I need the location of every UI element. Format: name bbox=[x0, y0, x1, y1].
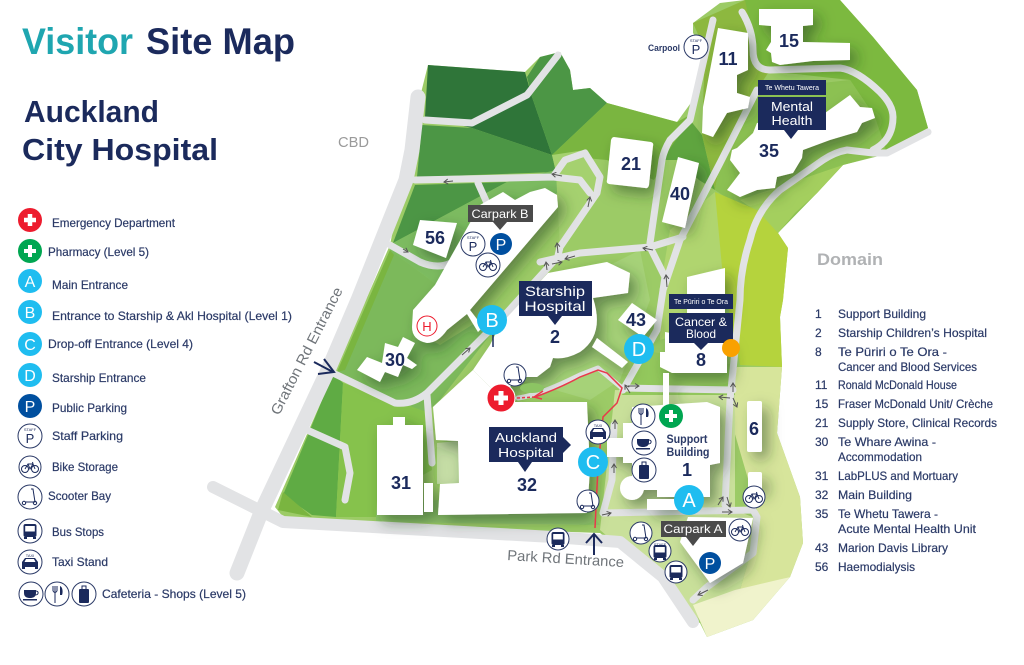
arrow: Grafton Rd entrance bbox=[314, 359, 334, 374]
legend: bike storage: Bike Storage bbox=[52, 460, 118, 474]
legend: scooter bay: Scooter Bay bbox=[48, 489, 111, 503]
building directory list bbox=[815, 307, 997, 574]
legend: public parking: P bbox=[25, 399, 35, 416]
label: Te Puriri o Te Ora bbox=[669, 294, 733, 309]
legend: emergency department: Emergency Department bbox=[52, 216, 176, 230]
building 2 starship bbox=[473, 262, 630, 402]
legend: emergency department bbox=[18, 208, 176, 232]
icon: shop bag bbox=[632, 458, 656, 482]
legend: map symbols bbox=[18, 208, 292, 606]
building directory list: 2 bbox=[815, 326, 822, 340]
title: Visitor bbox=[22, 21, 133, 62]
legend: entrance b: Entrance to Starship & Akl Hospital (Level 1) bbox=[52, 309, 292, 323]
label: Te Puriri o Te Ora: Te Pūriri o Te Ora bbox=[674, 297, 729, 306]
icon: carpool staff parking bbox=[684, 35, 708, 59]
label: Park Rd Entrance: Park Rd Entrance bbox=[507, 548, 625, 571]
legend: drop-off entrance bbox=[18, 332, 193, 356]
label: Cancer and Blood bbox=[669, 313, 733, 350]
legend: public parking bbox=[18, 394, 127, 418]
label: Mental Health: Mental bbox=[771, 99, 813, 114]
icon: emergency department bbox=[487, 384, 515, 412]
label: Cancer and Blood: Cancer & bbox=[675, 315, 727, 329]
icon: helipad H bbox=[417, 316, 437, 336]
icon: carpool staff parking: P bbox=[692, 42, 700, 57]
label: Mental Health bbox=[758, 97, 826, 139]
building directory list: 11 bbox=[815, 378, 828, 392]
label: Starship Hospital: Hospital bbox=[524, 298, 586, 314]
building numbers: 15 bbox=[779, 31, 799, 51]
building directory list: 1 bbox=[815, 307, 822, 321]
building directory list: Haemodialysis bbox=[838, 560, 915, 574]
legend: main entrance: A bbox=[25, 274, 36, 291]
building directory list: 15 bbox=[815, 397, 829, 411]
arrow: Park Rd entrance bbox=[586, 534, 602, 555]
marker: entrance C: C bbox=[586, 452, 600, 474]
icon: taxi stand: TAXI bbox=[594, 423, 602, 428]
legend: staff parking: STAFF bbox=[24, 427, 37, 432]
label: Auckland Hospital: Hospital bbox=[498, 445, 554, 460]
label: Te Whetu Tawera: Te Whetu Tawera bbox=[765, 83, 820, 92]
icon: scooter near C bbox=[577, 490, 599, 512]
icon: bike carpark A bbox=[729, 519, 751, 541]
icon: staff parking bbox=[461, 232, 485, 256]
marker: orange dot bbox=[722, 339, 740, 357]
label: CBD: CBD bbox=[338, 134, 369, 151]
legend: cafeteria and shops bbox=[19, 582, 246, 606]
map: road network bbox=[213, 12, 928, 622]
building directory list: 21 bbox=[815, 416, 829, 430]
label: Support Building bbox=[666, 432, 710, 459]
subtitle: hospital name: Auckland bbox=[24, 94, 159, 129]
building directory list: Support Building bbox=[838, 307, 926, 321]
building directory list: 30 bbox=[815, 435, 829, 449]
building numbers bbox=[385, 31, 799, 495]
building directory list: 43 bbox=[815, 541, 829, 555]
label: Grafton Rd Entrance: Grafton Rd Entrance bbox=[268, 285, 347, 418]
building directory list: Acute Mental Health Unit bbox=[838, 522, 977, 536]
building directory list: 31 bbox=[815, 469, 829, 483]
marker: entrance B: B bbox=[485, 310, 499, 332]
label: Starship Hospital bbox=[519, 281, 592, 325]
icon: staff parking: STAFF bbox=[467, 235, 480, 240]
icon: bus stop carpark A bbox=[665, 561, 687, 583]
label: Support Building: Support bbox=[666, 432, 708, 446]
legend: main entrance bbox=[18, 269, 128, 293]
building 56 bbox=[413, 220, 457, 258]
scooter and emergency route (red) bbox=[517, 370, 622, 528]
building numbers: 40 bbox=[670, 184, 690, 204]
map icons bbox=[417, 35, 765, 583]
icon: cafe cup bbox=[632, 431, 656, 455]
building 8 bbox=[660, 268, 727, 405]
legend: starship entrance: Starship Entrance bbox=[52, 371, 146, 385]
label: Carpark A bbox=[661, 521, 726, 546]
icon: bike storage B bbox=[476, 253, 500, 277]
label: Carpool: Carpool bbox=[648, 43, 680, 53]
icon: staff bus bbox=[649, 540, 671, 562]
building directory list: Accommodation bbox=[838, 450, 922, 464]
legend: bus stops bbox=[18, 519, 104, 543]
building 21 bbox=[607, 137, 653, 188]
building directory list: Main Building bbox=[838, 488, 912, 502]
link to entrance D bbox=[592, 338, 628, 368]
marker: entrance C bbox=[578, 447, 608, 477]
marker: entrance D: D bbox=[632, 339, 646, 361]
building directory list: 56 bbox=[815, 560, 829, 574]
icon: public parking B bbox=[490, 233, 512, 255]
label: Auckland Hospital bbox=[489, 427, 571, 472]
building numbers: 6 bbox=[749, 419, 759, 439]
icon: cafeteria cutlery bbox=[631, 404, 655, 428]
building directory list: Starship Children’s Hospital bbox=[838, 326, 987, 340]
building numbers: 11 bbox=[718, 49, 738, 69]
building directory list: Te Pūriri o Te Ora - bbox=[838, 345, 947, 359]
building numbers: 31 bbox=[391, 473, 411, 493]
bridge link bbox=[607, 438, 623, 457]
building numbers: 43 bbox=[626, 310, 646, 330]
marker: entrance D bbox=[624, 334, 654, 364]
building 1 support bbox=[623, 402, 720, 497]
building directory list: Cancer and Blood Services bbox=[838, 360, 977, 374]
building numbers: 56 bbox=[425, 228, 445, 248]
building 31 bbox=[377, 417, 423, 515]
icon: public parking A bbox=[699, 552, 721, 574]
legend: entrance b bbox=[18, 300, 292, 324]
building numbers: 1 bbox=[682, 460, 692, 480]
icon: taxi stand bbox=[586, 420, 610, 444]
building 11 bbox=[702, 28, 750, 137]
label: Carpark B bbox=[468, 205, 533, 230]
building numbers: 35 bbox=[759, 141, 779, 161]
building numbers: 32 bbox=[517, 475, 537, 495]
building directory list: Marion Davis Library bbox=[838, 541, 948, 555]
building numbers: 21 bbox=[621, 154, 641, 174]
label: Te Whetu Tawera bbox=[758, 80, 826, 95]
building 30 bbox=[357, 337, 417, 382]
legend: drop-off entrance: Drop-off Entrance (Level 4) bbox=[48, 337, 193, 351]
legend: taxi stand: TAXI bbox=[26, 553, 34, 558]
title bbox=[22, 21, 295, 62]
legend: staff parking bbox=[18, 424, 123, 448]
icon: scooter near emergency bbox=[504, 364, 526, 386]
legend: taxi stand bbox=[18, 550, 108, 574]
legend: starship entrance bbox=[18, 363, 146, 387]
legend: bus stops: Bus Stops bbox=[52, 525, 104, 539]
building directory list: LabPLUS and Mortuary bbox=[838, 469, 958, 483]
legend: taxi stand: Taxi Stand bbox=[52, 555, 108, 569]
marker: entrance A: A bbox=[682, 490, 696, 512]
label: Starship Hospital: Starship bbox=[525, 283, 585, 299]
label: Auckland Hospital: Auckland bbox=[495, 430, 557, 445]
subtitle: hospital name bbox=[22, 94, 218, 167]
legend: public parking: Public Parking bbox=[52, 401, 127, 415]
building directory list: Ronald McDonald House bbox=[838, 378, 957, 392]
legend: main entrance: Main Entrance bbox=[52, 278, 128, 292]
legend: entrance b: B bbox=[25, 305, 35, 322]
building: carpark B block bbox=[412, 188, 558, 343]
icon: pharmacy bbox=[659, 404, 683, 428]
building numbers: 2 bbox=[550, 327, 560, 347]
building 40 bbox=[662, 157, 699, 228]
label: Domain: Domain bbox=[817, 250, 883, 269]
annex of 31 bbox=[424, 483, 433, 512]
building directory list: Te Whetu Tawera - bbox=[838, 507, 938, 521]
building directory list: 8 bbox=[815, 345, 822, 359]
map: green campus grounds bbox=[275, 0, 928, 637]
legend: cafeteria and shops: Cafeteria - Shops (Level 5) bbox=[102, 587, 246, 601]
icon: bike near 6 bbox=[743, 486, 765, 508]
legend: staff parking: P bbox=[26, 431, 34, 446]
lower wing of building 1 bbox=[620, 476, 680, 510]
small building near 6 bbox=[748, 472, 762, 490]
building directory list: Fraser McDonald Unit/ Crèche bbox=[838, 397, 993, 411]
small traffic direction arrows bbox=[403, 174, 737, 595]
icon: staff bus: STAFF bbox=[654, 542, 667, 547]
building 6 bbox=[747, 401, 762, 452]
marker: entrance B bbox=[477, 305, 507, 347]
icon: bus stop Park Rd bbox=[547, 528, 569, 550]
legend: starship entrance: D bbox=[24, 368, 36, 385]
label: Carpark A: Carpark A bbox=[664, 522, 722, 536]
legend: bike storage bbox=[19, 456, 118, 478]
subtitle: hospital name: City Hospital bbox=[22, 132, 218, 167]
label: Cancer and Blood: Blood bbox=[686, 327, 716, 341]
building directory list: 32 bbox=[815, 488, 829, 502]
legend: drop-off entrance: C bbox=[24, 337, 36, 354]
label: Mental Health: Health bbox=[772, 113, 812, 128]
legend: scooter bay bbox=[18, 485, 111, 509]
icon: public parking B: P bbox=[496, 237, 506, 254]
icon: staff parking: P bbox=[469, 239, 477, 254]
building numbers: 30 bbox=[385, 350, 405, 370]
building directory list: Supply Store, Clinical Records bbox=[838, 416, 997, 430]
icon: carpool staff parking: STAFF bbox=[690, 38, 703, 43]
legend: pharmacy bbox=[18, 239, 149, 263]
title: Site Map bbox=[146, 21, 295, 62]
building numbers: 8 bbox=[696, 350, 706, 370]
building 32 main bbox=[433, 370, 590, 515]
label: Support Building: Building bbox=[666, 445, 710, 459]
icon: public parking A: P bbox=[705, 556, 715, 573]
building 15 bbox=[759, 9, 850, 65]
map: campus buildings bbox=[357, 9, 875, 583]
icon: scooter carpark A bbox=[630, 522, 652, 544]
legend: pharmacy: Pharmacy (Level 5) bbox=[48, 245, 149, 259]
garden courtyard beside emergency bbox=[506, 356, 544, 393]
building 35 bbox=[727, 95, 875, 197]
icon: helipad H: H bbox=[422, 319, 432, 334]
building directory list: Te Whare Awina - bbox=[838, 435, 936, 449]
carpark A block bbox=[680, 517, 753, 583]
label: Carpark B: Carpark B bbox=[472, 207, 528, 221]
building directory list: 35 bbox=[815, 507, 829, 521]
building 43 bbox=[618, 303, 657, 337]
marker: entrance A bbox=[674, 485, 704, 515]
legend: staff parking: Staff Parking bbox=[52, 429, 123, 443]
